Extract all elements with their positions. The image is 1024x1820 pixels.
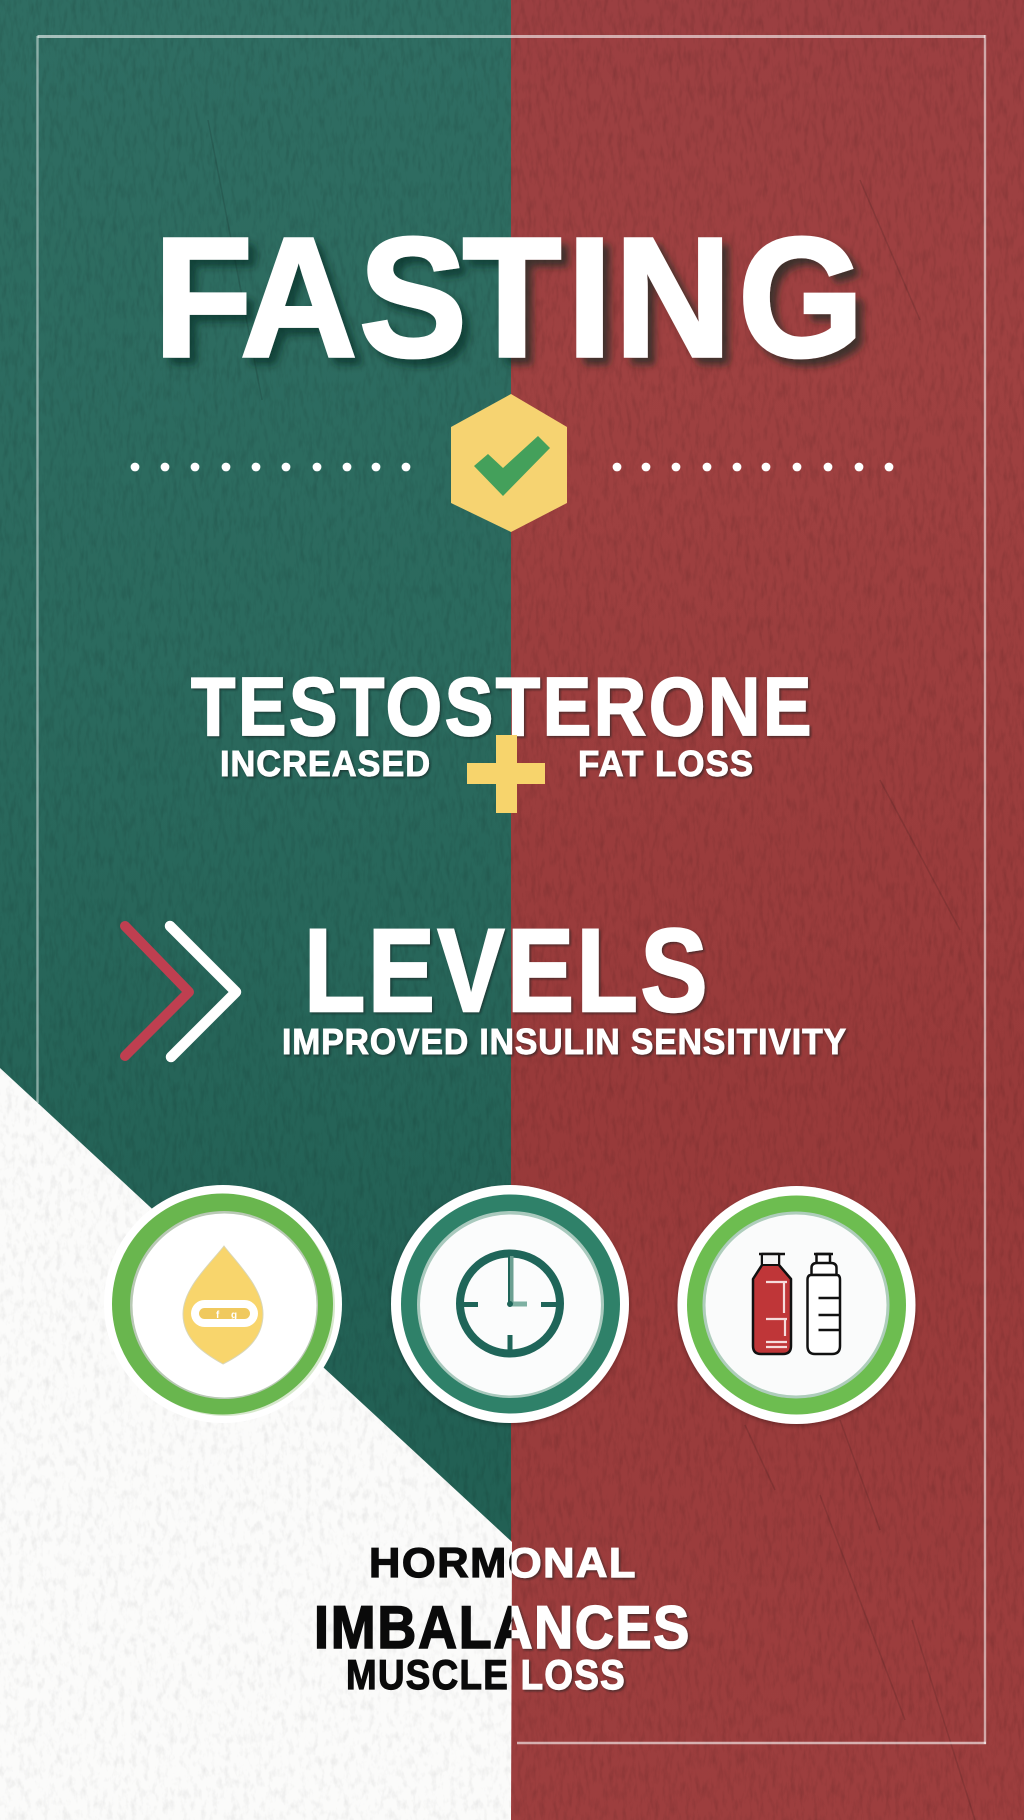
drop label pill: g xyxy=(231,1310,237,1321)
heading: IMBALANCES two-tone: IMBALANCES xyxy=(314,1594,691,1661)
heading: LEVELS: LEVELS xyxy=(304,905,710,1037)
title: FASTING: FASTING xyxy=(154,203,864,393)
icon: circle with clock xyxy=(391,1185,629,1423)
background scratches xyxy=(208,120,975,1820)
drop label pill xyxy=(191,1300,258,1327)
text: MUSCLE LOSS two-tone: MUSCLE LOSS xyxy=(346,1651,626,1698)
text: IMPROVED INSULIN SENSITIVITY: IMPROVED INSULIN SENSITIVITY xyxy=(282,1021,847,1062)
text: MUSCLE LOSS two-tone xyxy=(348,1659,626,1693)
icon: yellow plus xyxy=(467,735,545,813)
white bottle xyxy=(808,1254,840,1354)
red bottle xyxy=(753,1254,791,1354)
heading: HORMONAL two-tone: HORMONAL xyxy=(369,1539,637,1586)
dotted divider right xyxy=(613,463,893,471)
icon: double chevron arrow xyxy=(125,926,236,1057)
text: FAT LOSS: FAT LOSS xyxy=(578,743,754,784)
panel: red background xyxy=(511,0,1024,1820)
heading: HORMONAL two-tone xyxy=(371,1547,638,1581)
heading: IMBALANCES two-tone xyxy=(316,1604,690,1652)
heading: IMBALANCES two-tone: IMBALANCES xyxy=(314,1594,691,1661)
icon: hexagon check badge xyxy=(451,394,567,532)
panel: white diagonal area xyxy=(0,1068,512,1820)
panel: green background xyxy=(0,0,512,1820)
clock face xyxy=(460,1254,560,1354)
icon: circle with bottles xyxy=(678,1186,916,1424)
dotted divider left xyxy=(131,463,410,471)
heading: HORMONAL two-tone: HORMONAL xyxy=(369,1539,637,1586)
icon: circle with oil drop xyxy=(104,1185,342,1423)
text: INCREASED: INCREASED xyxy=(220,743,431,784)
heading: TESTOSTERONE: TESTOSTERONE xyxy=(191,660,814,753)
text: MUSCLE LOSS two-tone: MUSCLE LOSS xyxy=(346,1651,626,1698)
drop shape xyxy=(183,1246,263,1364)
drop label pill: f xyxy=(216,1310,220,1321)
